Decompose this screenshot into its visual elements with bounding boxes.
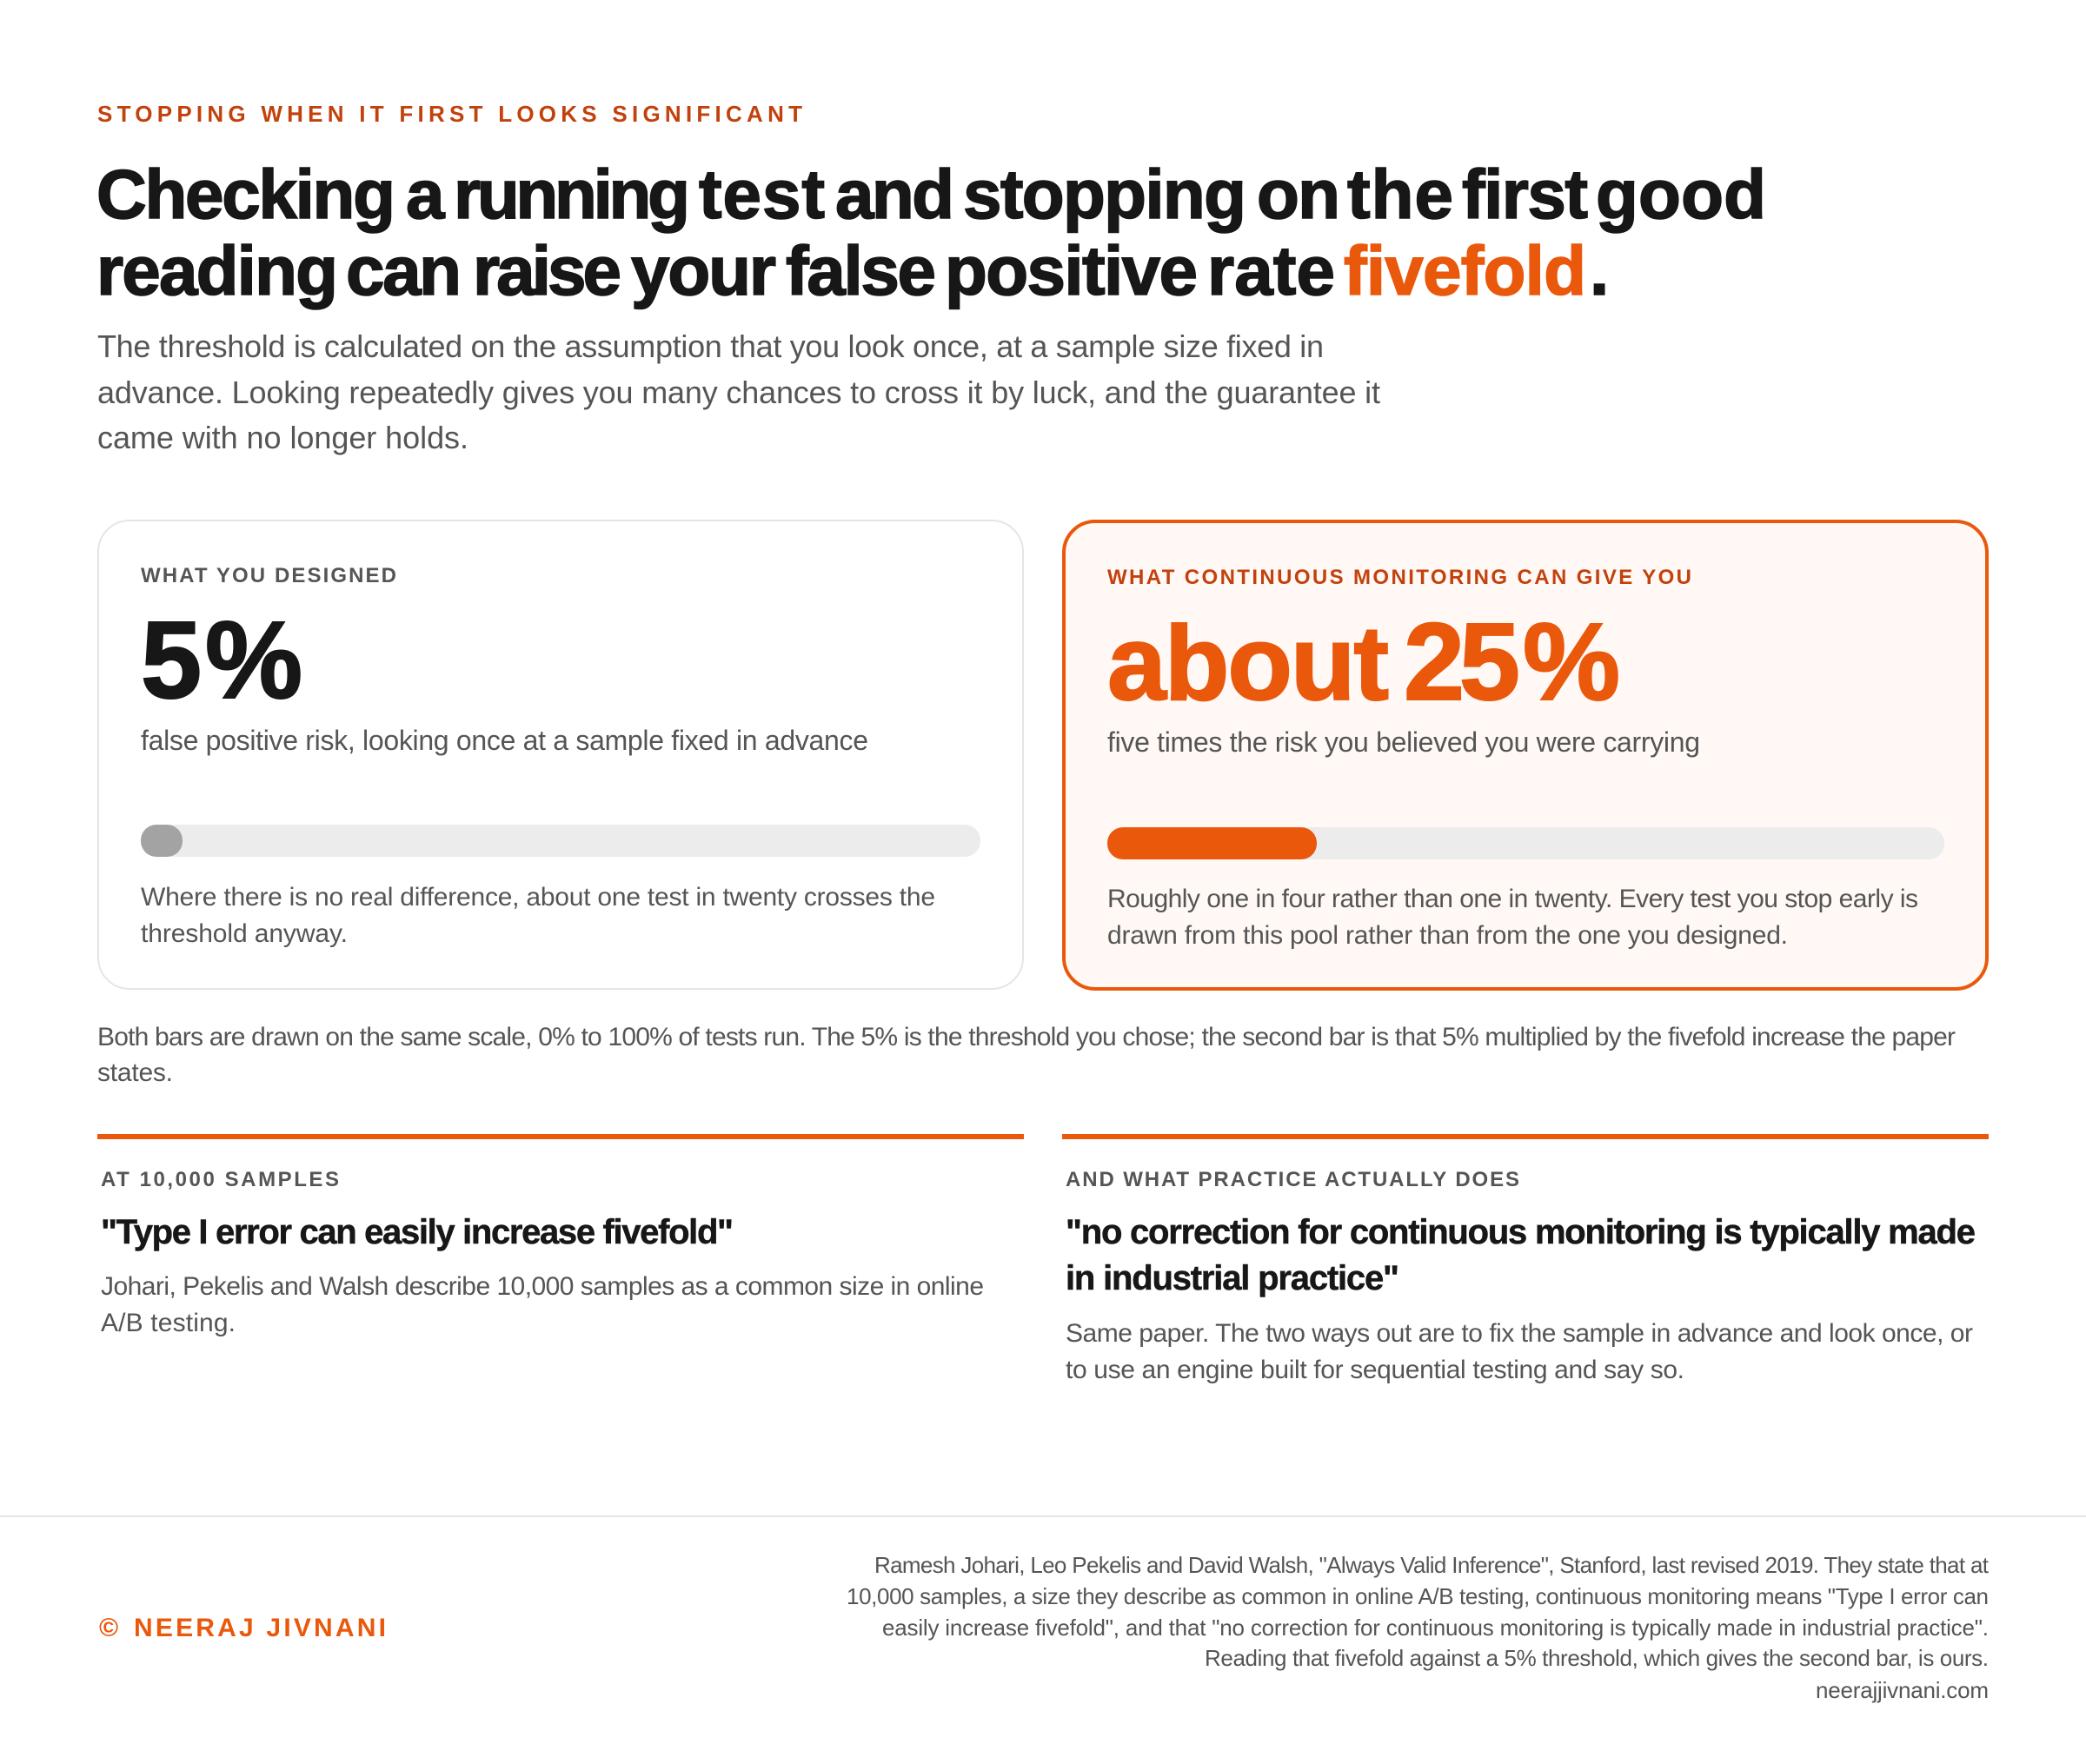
scale note: states. <box>97 1058 173 1087</box>
sources text: 10,000 samples, a size they describe as common in online A/B testing, continuous monitoring means "Type I error can <box>847 1583 1989 1609</box>
panel label: WHAT YOU DESIGNED <box>141 564 396 587</box>
sources text: easily increase fivefold", and that "no correction for continuous monitoring is typically made in industrial practice". <box>882 1615 1989 1641</box>
panel: what continuous monitoring can give you <box>1064 521 1987 989</box>
big number: 5%: 5 <box>141 599 202 721</box>
big number: 5% <box>141 599 302 721</box>
quote: "Type I error can easily increase fivefold" <box>101 1213 734 1251</box>
title: . <box>1590 232 1609 309</box>
note <box>141 883 935 948</box>
sources text: neerajjivnani.com <box>1816 1677 1989 1703</box>
sources text: Ramesh Johari, Leo Pekelis and David Walsh, "Always Valid Inference", Stanford, last revised 2019. They state that at <box>874 1552 1990 1578</box>
quote: in industrial practice" <box>1066 1259 1399 1297</box>
note: Where there is no real difference, about one test in twenty crosses the <box>141 883 935 912</box>
title: good <box>1596 156 1766 233</box>
subtitle text: The threshold is calculated on the assumption that you look once, at a sample size fixed in <box>97 328 1324 364</box>
title: false <box>786 232 936 309</box>
section: at 10,000 samples <box>97 1134 1024 1337</box>
title: a <box>406 156 445 233</box>
bar: 25 percent <box>1107 827 1944 859</box>
section: what practice actually does <box>1062 1134 1989 1384</box>
credit: NEERAJ JIVNANI <box>134 1614 386 1642</box>
body text <box>101 1272 984 1337</box>
big number: about 25% <box>1107 600 1620 723</box>
quote: "no correction for continuous monitoring is typically made <box>1066 1213 1976 1251</box>
title: rate <box>1207 232 1335 309</box>
eyebrow label: STOPPING WHEN IT FIRST LOOKS SIGNIFICANT <box>97 101 802 127</box>
scale note <box>97 1023 1956 1087</box>
description: false positive risk, looking once at a sample fixed in advance <box>141 725 868 756</box>
sources text: Reading that fivefold against a 5% threshold, which gives the second bar, is ours. <box>1205 1645 1989 1671</box>
title: raise <box>473 232 621 309</box>
big number: 5%: % <box>205 599 302 721</box>
subtitle text: advance. Looking repeatedly gives you many chances to cross it by luck, and the guarantee it <box>97 375 1380 410</box>
body text: Johari, Pekelis and Walsh describe 10,000 samples as a common size in online <box>101 1272 984 1301</box>
big number: about 25%: 25 <box>1404 600 1520 723</box>
body text: A/B testing. <box>101 1309 236 1337</box>
section label: AND WHAT PRACTICE ACTUALLY DOES <box>1066 1168 1519 1191</box>
note <box>1107 885 1918 950</box>
title: the <box>1347 156 1453 233</box>
note: Roughly one in four rather than one in twenty. Every test you stop early is <box>1107 885 1918 913</box>
body text: Same paper. The two ways out are to fix the sample in advance and look once, or <box>1066 1319 1973 1348</box>
panel: what you designed <box>98 521 1023 989</box>
credit: © <box>99 1614 118 1642</box>
quote <box>1066 1213 1976 1297</box>
big number: about 25%: about <box>1107 604 1389 722</box>
title: test <box>699 156 825 233</box>
description: five times the risk you believed you were carrying <box>1107 726 1700 758</box>
sources text <box>847 1552 1990 1703</box>
title: Checking <box>96 156 395 233</box>
footer divider <box>0 1515 2086 1517</box>
title: and <box>835 156 954 233</box>
body text: to use an engine built for sequential testing and say so. <box>1066 1356 1684 1384</box>
panel label: WHAT CONTINUOUS MONITORING CAN GIVE YOU <box>1107 566 1691 589</box>
bar: 5 percent <box>141 825 980 857</box>
body text <box>1066 1319 1973 1384</box>
title: first <box>1462 156 1588 233</box>
big number: about 25%: % <box>1523 600 1620 723</box>
note: drawn from this pool rather than from the one you designed. <box>1107 921 1788 950</box>
scale note: Both bars are drawn on the same scale, 0% to 100% of tests run. The 5% is the threshold you chose; the second bar is that 5% multiplied by the fivefold increase the paper <box>97 1023 1956 1051</box>
subtitle text: came with no longer holds. <box>97 420 468 455</box>
subtitle text <box>97 328 1380 455</box>
title <box>96 156 1766 309</box>
note: threshold anyway. <box>141 919 348 948</box>
title: your <box>631 232 776 309</box>
title: fivefold <box>1344 232 1586 309</box>
title: running <box>454 156 690 233</box>
section label: AT 10,000 SAMPLES <box>101 1168 339 1191</box>
title: stopping <box>963 156 1246 233</box>
title: reading <box>96 232 338 309</box>
title: can <box>346 232 462 309</box>
title: on <box>1257 156 1340 233</box>
title: positive <box>945 232 1198 309</box>
